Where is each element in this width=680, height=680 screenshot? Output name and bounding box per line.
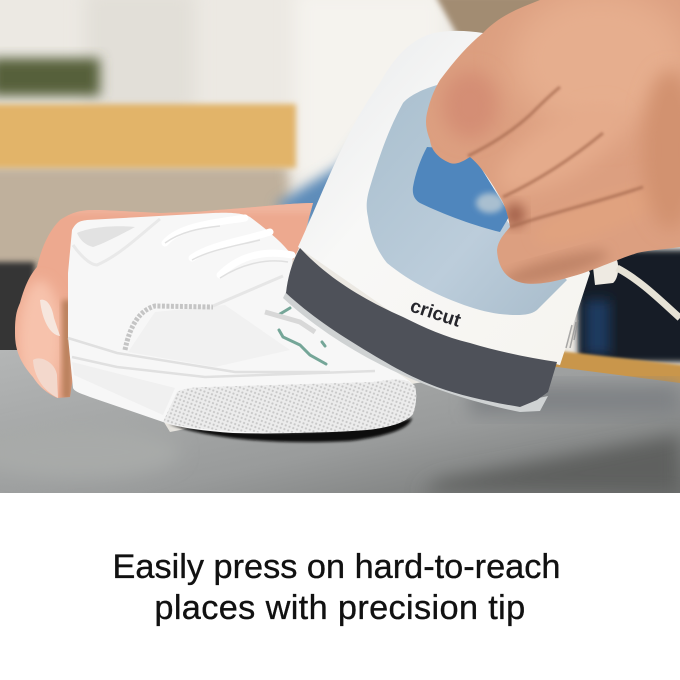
mini heat press iron: [283, 31, 680, 412]
caption: places with precision tip: [154, 589, 526, 627]
brand label: cricut: [407, 296, 464, 332]
plug: [593, 260, 618, 285]
power cord: [617, 268, 680, 318]
green design: [279, 308, 326, 364]
collar opening: [77, 226, 135, 247]
collar edge and laces: [73, 219, 160, 265]
sole lines: [68, 338, 375, 377]
plate edge: [283, 292, 548, 412]
white canvas shoe: [68, 213, 416, 433]
blue handle recess: [367, 85, 567, 315]
finger creases: [468, 87, 560, 156]
care text marks: [566, 320, 578, 348]
stitched panel: [128, 305, 290, 367]
caption: Easily press on hard-to-reach: [112, 548, 560, 586]
right hand gripping handle: [420, 0, 680, 300]
photo: iron pressing a design onto a white shoe: [0, 0, 680, 493]
iron body: [298, 31, 590, 365]
background wall and shelf: [0, 0, 680, 432]
ironing board: [0, 350, 680, 493]
fingernails: [40, 300, 60, 336]
toe cap: [163, 380, 416, 433]
opening through handle: [413, 147, 510, 232]
grey band: [286, 248, 557, 407]
caption: [112, 548, 560, 627]
left hand holding shoe: [15, 203, 313, 398]
